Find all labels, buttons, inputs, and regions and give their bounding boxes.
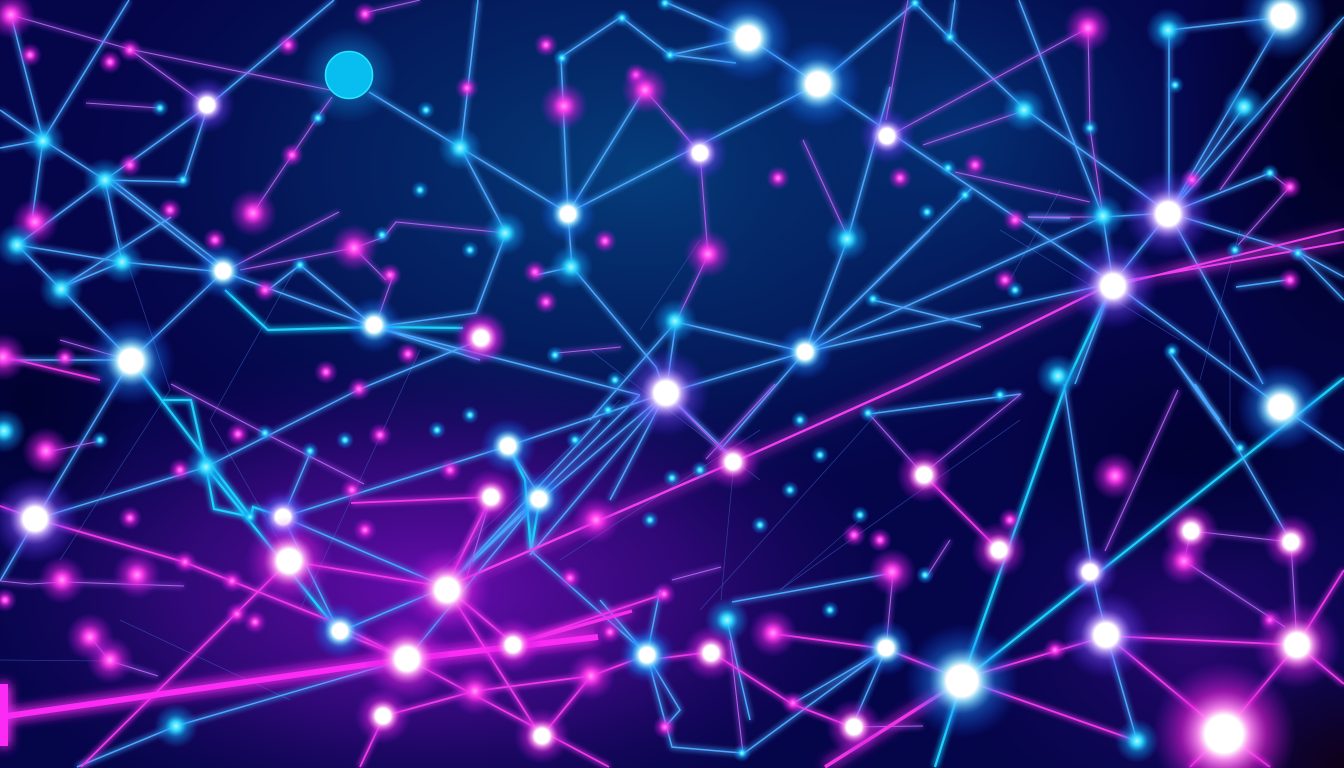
faint background connection lines bbox=[0, 180, 1240, 700]
thick magenta beams bbox=[0, 229, 1344, 767]
small cyan particles bbox=[91, 0, 1307, 619]
magenta lines bbox=[0, 356, 1344, 767]
large cyan circle node bbox=[301, 27, 397, 123]
